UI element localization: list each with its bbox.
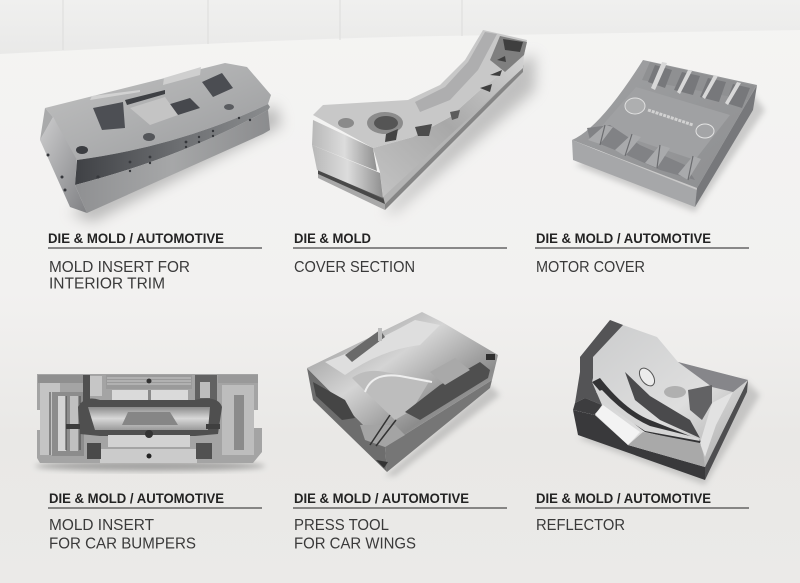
product name: REFLECTOR xyxy=(536,517,625,534)
panel: reflector xyxy=(535,320,760,534)
product image: press tool xyxy=(307,312,500,476)
product name: FOR CAR WINGS xyxy=(294,536,416,552)
category label: DIE & MOLD / AUTOMOTIVE xyxy=(294,491,469,506)
panel: mold insert for car bumpers xyxy=(35,374,265,552)
category label: DIE & MOLD / AUTOMOTIVE xyxy=(49,491,224,506)
category label: DIE & MOLD / AUTOMOTIVE xyxy=(48,231,224,246)
product image: motor cover xyxy=(572,60,765,212)
panel: cover section xyxy=(293,30,535,276)
product name: MOLD INSERT FOR xyxy=(49,259,190,276)
category label: DIE & MOLD / AUTOMOTIVE xyxy=(536,491,711,506)
panel: motor cover xyxy=(535,60,765,276)
product image: mold insert xyxy=(40,63,282,222)
product name: COVER SECTION xyxy=(294,259,415,276)
panel: mold insert for interior trim xyxy=(40,63,282,292)
product name: MOLD INSERT xyxy=(49,517,155,534)
product name: PRESS TOOL xyxy=(294,517,389,534)
product name: FOR CAR BUMPERS xyxy=(49,536,196,552)
product image: cover section xyxy=(312,30,535,212)
background wall xyxy=(0,0,800,54)
panel: press tool for car wings xyxy=(293,312,507,552)
product name: MOTOR COVER xyxy=(536,259,645,276)
category label: DIE & MOLD / AUTOMOTIVE xyxy=(536,231,711,246)
product image: reflector xyxy=(573,320,760,485)
product name: INTERIOR TRIM xyxy=(49,276,165,292)
category label: DIE & MOLD xyxy=(294,231,371,246)
product image: bumper mold insert xyxy=(35,374,265,471)
